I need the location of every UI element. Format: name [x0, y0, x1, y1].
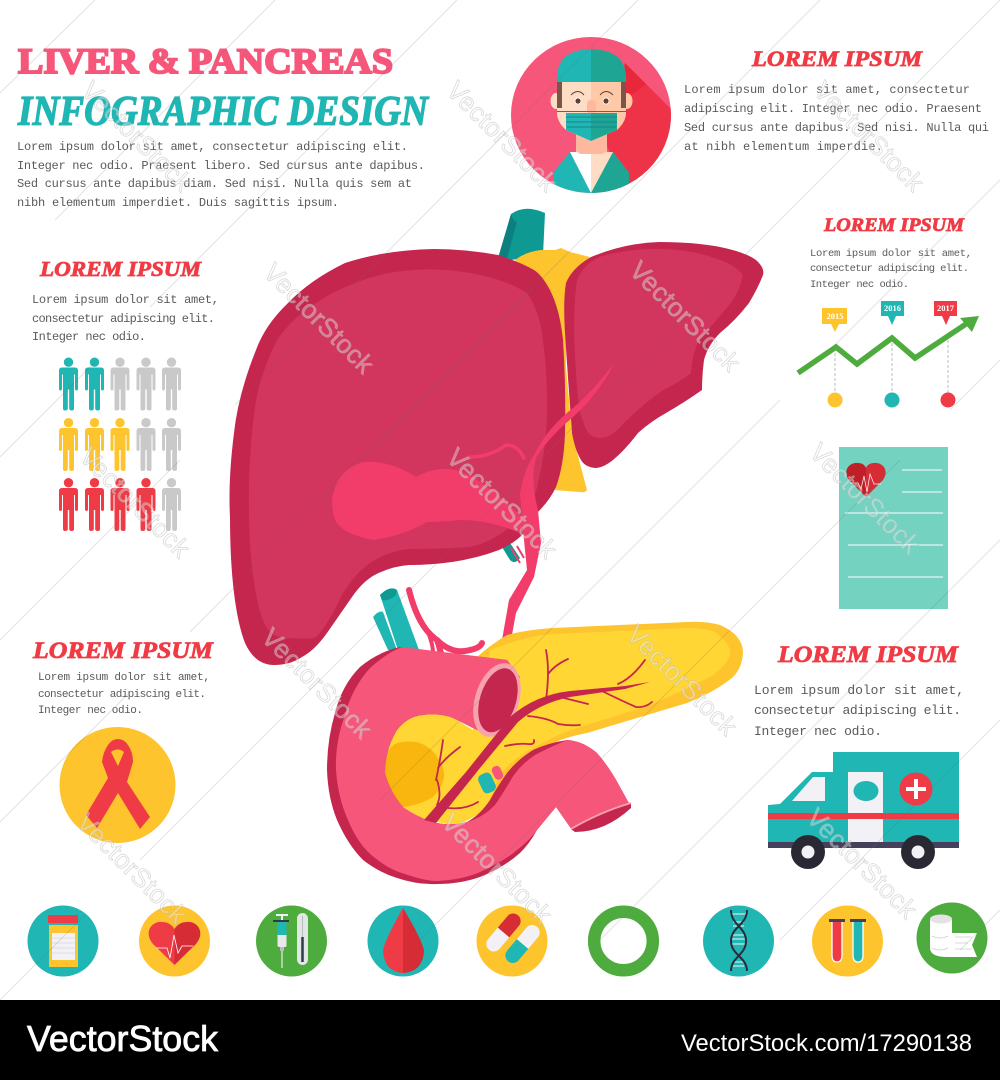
title: LIVER & PANCREAS: [18, 41, 393, 81]
footer bar: [0, 1000, 1000, 1080]
icon: ambulance: [768, 752, 959, 869]
text block: consectetur adipiscing elit.: [32, 312, 215, 326]
chart: arrow line with year flags: 2015: [826, 311, 844, 321]
infographic canvas: VectorStock: [436, 807, 559, 930]
duodenum: [327, 647, 631, 884]
text block: [754, 683, 964, 739]
duodenum opening: lower: [571, 803, 631, 832]
left lobe: [564, 242, 763, 468]
text block: consectetur adipiscing elit.: [754, 703, 961, 718]
falciform ligament: [515, 248, 590, 492]
icon: medicine bottle: [28, 906, 98, 976]
pancreatic head shade: [383, 742, 444, 807]
infographic canvas: VectorStock: [76, 75, 199, 198]
panel: ambulance section: [754, 642, 964, 869]
icon: heart with pulse: [846, 463, 886, 497]
text block: Integer nec odio.: [754, 724, 882, 739]
pancreas body: [383, 622, 743, 825]
text block: Sed cursus ante dapibus. Sed nisi. Nulla qui: [684, 121, 989, 135]
infographic canvas: VectorStock: [801, 802, 924, 925]
right lobe: [230, 249, 565, 665]
chart: arrow line with year flags: 2016: [884, 303, 901, 313]
icon: pills: [476, 906, 548, 976]
text block: [32, 293, 219, 344]
hepatic vessels: [373, 588, 482, 655]
duodenum opening: upper: [465, 657, 529, 743]
icon: syringe and thermometer: [256, 906, 327, 976]
intro text block: Integer nec odio. Praesent libero. Sed cursus ante dapibus.: [17, 159, 425, 173]
icon: blood drop: [368, 906, 438, 976]
pancreatic ducts: [424, 650, 652, 823]
pancreas and duodenum illustration: [327, 588, 743, 884]
vena cava: [498, 209, 545, 562]
text block: Lorem ipsum dolor sit amet, consectetur: [684, 83, 970, 97]
icon: doctor avatar: [511, 37, 680, 200]
tablet spots: [476, 765, 504, 795]
icon: dna: [703, 906, 774, 976]
intro text block: [17, 140, 425, 210]
panel: top right text: [684, 46, 989, 154]
panel: left ribbon: [32, 638, 215, 843]
footer url text: VectorStock.com/17290138: [681, 1030, 972, 1057]
text block: Integer nec odio.: [32, 330, 146, 344]
text block: Integer nec odio.: [38, 705, 143, 717]
infographic canvas: VectorStock: [256, 622, 379, 745]
icon: ring: [594, 912, 653, 970]
text block: [810, 248, 972, 291]
intro text block: Sed cursus ante dapibus diam. Sed nisi. Nulla quis sem at: [17, 177, 412, 191]
heading: LOREM IPSUM: [32, 638, 215, 663]
text block: consectetur adipiscing elit.: [38, 689, 206, 701]
text block: adipiscing elit. Integer nec odio. Praesent: [684, 102, 982, 116]
text block: at nibh elementum imperdie.: [684, 140, 883, 154]
panel: medical document: [839, 447, 948, 609]
bile duct: [470, 362, 615, 640]
heading: LOREM IPSUM: [823, 215, 965, 236]
infographic canvas: VectorStock: [621, 619, 744, 742]
intro text block: Lorem ipsum dolor sit amet, consectetur adipiscing elit.: [17, 140, 408, 154]
text block: Lorem ipsum dolor sit amet,: [754, 683, 964, 698]
intro text block: nibh elementum imperdiet. Duis sagittis ipsum.: [17, 196, 339, 210]
text block: Lorem ipsum dolor sit amet,: [810, 248, 972, 260]
heading: LOREM IPSUM: [751, 46, 924, 71]
infographic canvas: VectorStock: [258, 257, 381, 380]
icon: test tubes: [812, 906, 883, 976]
infographic canvas: VectorStock: [441, 442, 564, 565]
heading: LOREM IPSUM: [39, 257, 202, 281]
infographic canvas: VectorStock: [74, 441, 197, 564]
panel: left people statistics: [32, 257, 219, 531]
icon: awareness ribbon: [60, 727, 176, 843]
text block: Lorem ipsum dolor sit amet,: [38, 672, 210, 684]
gallbladder: [332, 462, 524, 540]
infographic canvas: VectorStock: [441, 75, 564, 198]
text block: [684, 83, 989, 154]
icon: heart pulse: [139, 906, 210, 976]
text block: [38, 672, 210, 717]
title: INFOGRAPHIC DESIGN: [17, 89, 429, 135]
text block: Integer nec odio.: [810, 279, 909, 291]
infographic canvas: VectorStock: [804, 437, 927, 560]
infographic canvas: VectorStock: [808, 75, 931, 198]
chart: arrow line with year flags: 2017: [937, 303, 955, 313]
text block: Lorem ipsum dolor sit amet,: [32, 293, 219, 307]
text block: consectetur adipiscing elit.: [810, 263, 969, 275]
chart: arrow line with year flags: [798, 301, 979, 408]
icon row: [28, 902, 988, 976]
footer logo text: VectorStock: [27, 1018, 219, 1059]
title: [17, 41, 429, 135]
chart: people pictogram: [59, 358, 181, 531]
heading: LOREM IPSUM: [777, 642, 960, 667]
panel: right timeline: [798, 215, 979, 408]
icon: bandage: [916, 902, 988, 974]
infographic canvas: VectorStock: [624, 255, 747, 378]
infographic canvas: VectorStock: [71, 807, 194, 930]
liver illustration: [230, 209, 763, 665]
